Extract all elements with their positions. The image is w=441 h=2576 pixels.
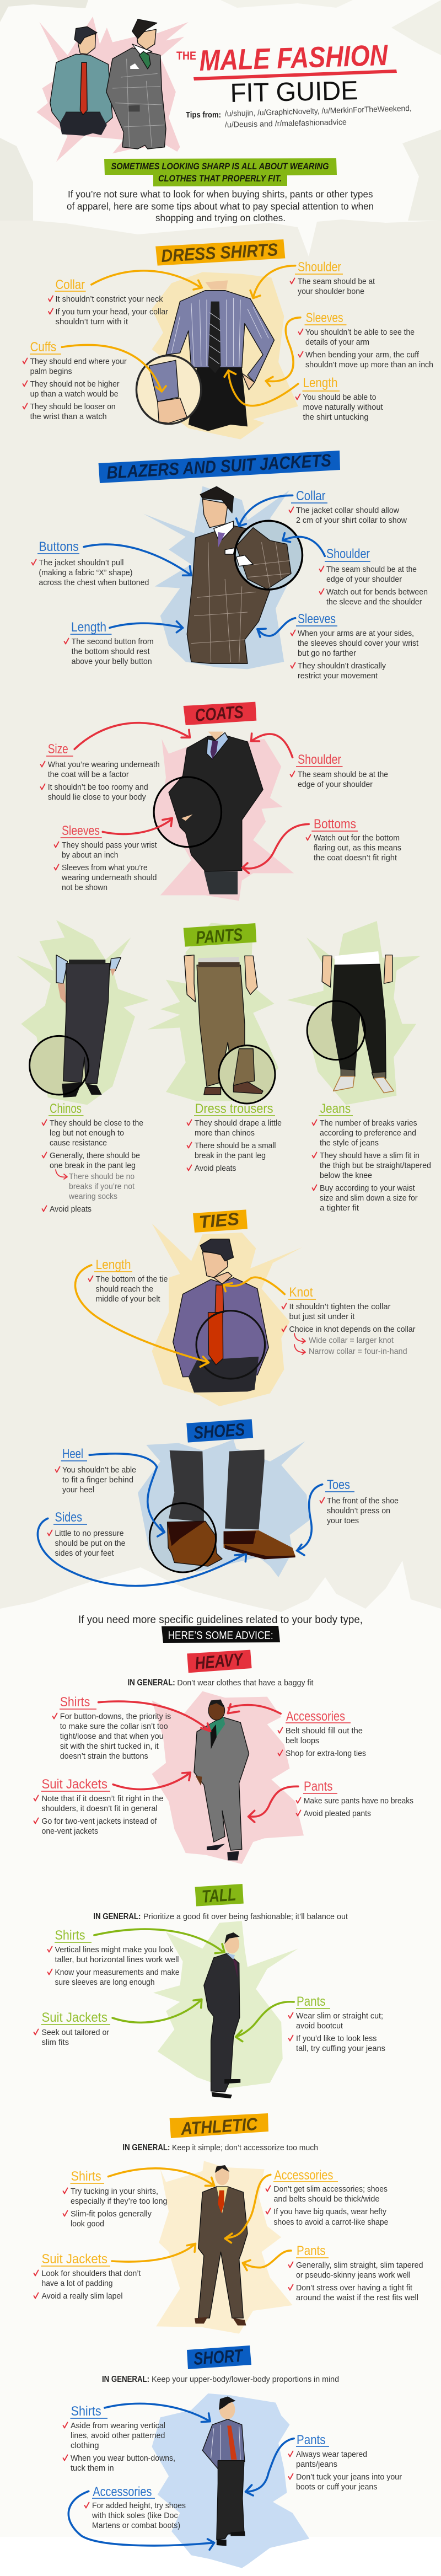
general advice line: Keep it simple; don’t accessorize too much [172, 2143, 318, 2152]
callout: knot: Knot [289, 1285, 313, 1300]
callout: shoulder: The seam should be at the [298, 770, 388, 779]
callout: sleeves [54, 823, 157, 892]
callout: bottoms: flaring out, as this means [314, 843, 401, 853]
illustration: heavy figure [152, 1691, 304, 1864]
callout: length: Length [96, 1257, 131, 1272]
column: chinos: There should be no [69, 1172, 135, 1181]
callout: length: Length [71, 620, 106, 635]
callout: shirts: Slim-fit polos generally [71, 2209, 152, 2219]
callout: accessories [266, 2168, 388, 2227]
section intro: body type advice: If you need more specific guidelines related to your body type, [78, 1614, 363, 1626]
arrows [75, 1265, 284, 1367]
callout: shirts: lines, avoid other patterned [71, 2431, 165, 2440]
callout: sleeves: the sleeves should cover your wrist [298, 639, 419, 648]
callout: size: should lie close to your body [48, 792, 146, 802]
callout: length [64, 620, 154, 666]
column: jeans: below the knee [320, 1171, 372, 1180]
column: jeans: They should have a slim fit in [320, 1151, 420, 1160]
callout: pants [289, 1994, 385, 2053]
callout: shoulder [290, 260, 375, 296]
detail circle: cuff [136, 356, 201, 424]
panel: blazers and suit jackets [32, 450, 428, 681]
banner heading: blazers: BLAZERS AND SUIT JACKETS [106, 450, 332, 483]
column: dress trousers: There should be a small [195, 1141, 276, 1150]
callout: accessories: Shop for extra-long ties [286, 1749, 366, 1758]
callout: shoulder: edge of your shoulder [326, 575, 402, 584]
callout: length: should reach the [96, 1284, 153, 1294]
arrows [108, 2168, 291, 2270]
callout: sleeves: When bending your arm, the cuff [305, 350, 420, 360]
callout: buttons: across the chest when buttoned [39, 578, 149, 587]
callout: sleeves: but go no farther [298, 649, 356, 658]
callout: size: the coat will be a factor [48, 770, 129, 779]
callout: size: It shouldn’t be too roomy and [48, 783, 148, 792]
callout: toes: The front of the shoe [327, 1496, 399, 1506]
general advice line: IN GENERAL: [122, 2143, 170, 2152]
callout: knot [282, 1285, 416, 1356]
banner heading: pants: PANTS [195, 924, 244, 947]
callout: cuffs: They should not be higher [30, 379, 120, 389]
column: dress trousers [187, 1101, 282, 1173]
callout: heel [55, 1447, 136, 1495]
credits: /u/Deusis and /r/malefashionadvice [225, 118, 347, 130]
callout: shirts: Shirts [71, 2404, 101, 2419]
arrows [62, 266, 300, 406]
illustration: chinos figure [17, 920, 149, 1105]
callout: knot: Narrow collar = four-in-hand [309, 1347, 407, 1356]
green subtitle banner [104, 158, 337, 186]
credits: /u/shujin, /u/GraphicNovelty, /u/MerkinForTheWeekend, [225, 104, 412, 119]
panel: coats [41, 701, 401, 901]
illustration: dress shirt figure [152, 272, 298, 440]
credits: Tips from: [186, 110, 221, 120]
callout: pants [289, 2433, 402, 2492]
intro paragraph: If you’re not sure what to look for when buying shirts, pants or other types [68, 189, 373, 200]
callout: cuffs: They should be looser on [30, 402, 116, 411]
callout: collar: If you turn your head, your collar [55, 307, 168, 317]
callout: suit jackets [34, 2010, 110, 2047]
column: dress trousers: Avoid pleats [195, 1164, 236, 1173]
callout: shirts: sure sleeves are long enough [55, 1978, 154, 1987]
callout: collar: Collar [55, 277, 85, 292]
callout: shirts: Shirts [55, 1928, 85, 1943]
callout: shirts: Shirts [60, 1695, 90, 1710]
callout: shoulder [320, 547, 428, 607]
callout: sleeves: wearing underneath should [61, 873, 157, 882]
panel: pants [17, 920, 431, 1214]
callout: sides: Sides [55, 1510, 82, 1525]
callout: sleeves: When your arms are at your sides, [298, 629, 414, 638]
panel: tall [34, 1884, 385, 2098]
column: dress trousers: Dress trousers [195, 1101, 273, 1116]
panel: short [63, 2345, 402, 2568]
banner heading: shoes: SHOES [193, 1420, 246, 1443]
illustration: dress trousers figure [148, 923, 278, 1104]
callout: cuffs: palm begins [30, 367, 72, 376]
callout: collar: The jacket collar should allow [296, 506, 399, 515]
callout: toes: Toes [327, 1477, 350, 1492]
title: fit guide: FIT GUIDE [230, 76, 358, 108]
green subtitle banner: CLOTHES THAT PROPERLY FIT. [158, 173, 282, 184]
callout: shoulder: edge of your shoulder [298, 780, 373, 789]
illustration: coat figure with sleeve detail [154, 732, 294, 901]
column: jeans: according to preference and [320, 1128, 416, 1138]
callout: shoulder: Shoulder [298, 752, 341, 767]
banner heading: dress shirts: DRESS SHIRTS [160, 239, 279, 266]
callout: accessories: Accessories [274, 2168, 333, 2183]
callout: suit jackets [34, 2252, 141, 2301]
column: dress trousers: They should drape a little [195, 1118, 282, 1128]
column: jeans: the style of jeans [320, 1138, 379, 1148]
panel: ties [75, 1209, 415, 1406]
callout: pants [289, 2243, 423, 2302]
arrows [94, 1929, 294, 2042]
callout: pants: avoid bootcut [296, 2021, 343, 2031]
column: jeans: Jeans [320, 1101, 351, 1116]
column: jeans: Buy according to your waist [320, 1183, 415, 1193]
callout: cuffs: up than a watch would be [30, 389, 119, 399]
callout: buttons [32, 539, 149, 587]
intro paragraph: of apparel, here are some tips about what to pay special attention to when [67, 201, 374, 212]
column: chinos: breaks if you’re not [69, 1182, 135, 1191]
callout: bottoms: the coat doesn’t fit right [314, 853, 397, 863]
callout: accessories: and belts should be thick/wide [273, 2194, 379, 2204]
callout: pants: Pants [304, 1779, 333, 1794]
callout: shirts: Aside from wearing vertical [71, 2421, 165, 2430]
callout: suit jackets [34, 1777, 163, 1836]
arrows [68, 2403, 294, 2550]
callout: cuffs [23, 340, 127, 421]
column: jeans: a tighter fit [320, 1203, 359, 1213]
callout: accessories: Martens or combat boots) [92, 2521, 180, 2530]
callout: buttons: The jacket shouldn’t pull [39, 558, 123, 567]
illustration: short figure [152, 2393, 309, 2568]
illustration: blazer figure with shoulder detail [143, 486, 302, 669]
callout: bottoms: Watch out for the bottom [314, 833, 400, 843]
callout: shoulder [290, 752, 388, 789]
callout: cuffs: They should end where your [30, 357, 127, 366]
callout: length: middle of your belt [96, 1294, 160, 1304]
panel: dress shirts [23, 239, 433, 440]
arrows [99, 1701, 298, 1822]
callout: pants: around the waist if the rest fits well [296, 2293, 418, 2302]
callout: accessories: shoes to avoid a carrot-like shape [273, 2218, 388, 2227]
general advice line: IN GENERAL: [102, 2375, 149, 2384]
callout: heel: You shouldn’t be able [62, 1465, 136, 1475]
illustration: jeans figure [287, 921, 421, 1105]
callout: sleeves [291, 612, 419, 681]
callout: accessories: belt loops [286, 1736, 319, 1745]
column: chinos [42, 1101, 143, 1214]
callout: knot: but just sit under it [289, 1312, 355, 1321]
panel: heavy [34, 1649, 413, 1864]
callout: length: Length [303, 376, 337, 390]
callout: sleeves: You shouldn’t be able to see the [305, 328, 415, 337]
callout: size: Size [48, 742, 68, 757]
illustration: two men in shirt and suit [36, 17, 189, 162]
callout: size [41, 742, 160, 802]
callout: suit jackets: Seek out tailored or [42, 2028, 109, 2037]
illustration: tall figure [153, 1921, 298, 2098]
column: chinos: Avoid pleats [50, 1204, 92, 1214]
callout: shirts: For button-downs, the priority is [60, 1712, 171, 1721]
banner heading: athletic: ATHLETIC [180, 2114, 259, 2139]
column: chinos: wearing socks [68, 1192, 117, 1201]
column: jeans [312, 1101, 431, 1213]
column: chinos: Generally, there should be [50, 1151, 140, 1160]
banner heading: short: SHORT [193, 2345, 244, 2369]
callout: pants: pants/jeans [296, 2460, 337, 2469]
callout: pants: If you’d like to look less [296, 2034, 377, 2043]
column: chinos: Chinos [50, 1101, 82, 1116]
title: the male fashion: MALE FASHION [199, 39, 389, 77]
callout: shoulder: Watch out for bends between [326, 587, 428, 597]
arrows [84, 495, 325, 637]
callout: collar: It shouldn’t constrict your neck [55, 294, 163, 304]
callout: cuffs: the wrist than a watch [30, 412, 107, 421]
callout: toes: your toes [327, 1516, 359, 1525]
callout: accessories: Accessories [286, 1709, 345, 1724]
general advice line: Don’t wear clothes that have a baggy fit [177, 1678, 314, 1688]
callout: pants: boots or cuff your jeans [296, 2482, 377, 2492]
callout: pants: tall, try cuffing your jeans [296, 2044, 385, 2053]
banner heading: ties: TIES [198, 1209, 240, 1232]
column: chinos: They should be close to the [50, 1118, 143, 1128]
intro paragraph: shopping and trying on clothes. [155, 212, 286, 223]
callout: collar: 2 cm of your shirt collar to show [296, 516, 407, 525]
callout: accessories [85, 2484, 186, 2530]
callout: shoulder: The seam should be at [298, 277, 375, 286]
intro paragraph [67, 189, 374, 223]
callout: shirts: to make sure the collar isn’t too [60, 1722, 168, 1731]
column: jeans: the thigh but be straight/tapered [320, 1161, 431, 1170]
callout: collar: Collar [296, 489, 326, 504]
callout: length: above your belly button [72, 657, 152, 666]
callout: sleeves: Sleeves [298, 612, 336, 626]
callout: shirts: When you wear button-downs, [71, 2454, 175, 2463]
callout: heel: Heel [62, 1447, 83, 1461]
callout: accessories: Belt should fill out the [286, 1726, 363, 1736]
column: jeans: The number of breaks varies [320, 1118, 417, 1128]
callout: pants: Generally, slim straight, slim tapered [296, 2261, 423, 2270]
callout: suit jackets: Suit Jackets [42, 2252, 107, 2267]
callout: collar [49, 277, 168, 326]
title: the male fashion: THE [176, 50, 196, 62]
credits [186, 104, 412, 130]
callout: sleeves: restrict your movement [298, 671, 378, 681]
callout: sleeves: not be shown [62, 883, 107, 892]
callout: shirts: Know your measurements and make [55, 1968, 180, 1977]
callout: pants [297, 1779, 413, 1818]
callout: length: the bottom should rest [72, 647, 150, 656]
arrows [37, 1454, 322, 1586]
callout: sleeves: shouldn’t move up more than an inch [305, 360, 433, 369]
callout: shirts [53, 1695, 171, 1761]
callout: toes [320, 1477, 399, 1525]
callout: shirts: Shirts [71, 2169, 101, 2184]
column: jeans: size and slim down a size for [320, 1193, 418, 1203]
callout: shoulder: your shoulder bone [298, 287, 364, 296]
illustration: shoes and trouser legs with detail circle [138, 1439, 309, 1577]
title block with two illustrated men [36, 17, 412, 223]
callout: toes: shouldn’t press on [327, 1506, 390, 1515]
callout: sleeves: They should pass your wrist [62, 840, 157, 850]
callout: shoulder: The seam should be at the [326, 565, 417, 574]
callout: size: What you’re wearing underneath [48, 760, 160, 769]
banner heading: coats: COATS [194, 701, 244, 725]
callout: collar: shouldn’t turn with it [55, 317, 128, 326]
illustration: tie figure with detail circle [152, 1223, 302, 1406]
callout: sleeves: by about an inch [62, 850, 118, 860]
callout: sleeves: They shouldn’t drastically [298, 661, 386, 671]
callout: length: move naturally without [303, 403, 383, 412]
callout: sleeves [299, 310, 433, 369]
callout: shirts: tight/loose and that when you [60, 1732, 164, 1741]
callout: sides: Little to no pressure [55, 1529, 123, 1538]
callout: suit jackets: Suit Jackets [42, 2010, 107, 2025]
callout: accessories: If you have big quads, wear hefty [273, 2207, 386, 2216]
section intro: body type advice [78, 1614, 363, 1643]
callout: accessories: Don’t get slim accessories; shoes [273, 2184, 388, 2194]
callout: pants: or pseudo-skinny jeans work well [296, 2270, 411, 2280]
banner heading: heavy: HEAVY [194, 1649, 245, 1673]
callout: accessories: with thick soles (like Doc [92, 2511, 178, 2520]
callout: cuffs: Cuffs [30, 340, 56, 355]
callout: shirts: tuck them in [71, 2463, 114, 2473]
callout: accessories: Accessories [93, 2484, 152, 2499]
callout: shirts: Vertical lines might make you look [55, 1945, 174, 1954]
callout: heel: your heel [62, 1485, 94, 1495]
callout: suit jackets: have a lot of padding [42, 2279, 112, 2288]
callout: length: You should be able to [303, 393, 376, 402]
callout: accessories: For added height, try shoes [92, 2501, 186, 2510]
callout: shirts: especially if they’re too long [71, 2197, 168, 2206]
callout: shirts [63, 2404, 175, 2473]
callout: length: The second button from [72, 637, 154, 646]
callout: pants: Don’t stress over having a tight fit [296, 2283, 413, 2293]
callout: sleeves: Sleeves [306, 310, 343, 325]
callout: suit jackets: Look for shoulders that don’t [42, 2269, 141, 2278]
callout: sleeves: details of your arm [305, 338, 369, 347]
callout: sleeves: Sleeves [62, 823, 100, 838]
callout: pants: Make sure pants have no breaks [304, 1796, 413, 1806]
panel: athletic [34, 2113, 423, 2334]
callout: suit jackets: Suit Jackets [42, 1777, 107, 1792]
section intro: body type advice: HERE’S SOME ADVICE: [168, 1630, 273, 1642]
callout: sleeves: Sleeves from what you’re [62, 863, 148, 872]
green subtitle banner: SOMETIMES LOOKING SHARP IS ALL ABOUT WEARING [111, 161, 329, 172]
callout: pants: Pants [297, 2243, 325, 2258]
callout: shirts: Try tucking in your shirts, [71, 2187, 158, 2196]
callout: shirts [63, 2169, 168, 2229]
callout: pants: Don’t tuck your jeans into your [296, 2472, 402, 2482]
callout: length: The bottom of the tie [96, 1274, 168, 1284]
callout: pants: Wear slim or straight cut; [296, 2011, 383, 2021]
callout: suit jackets: Note that if it doesn’t fit right in the [42, 1794, 163, 1803]
column: chinos: one break in the pant leg [50, 1161, 136, 1170]
callout: shoulder: Shoulder [298, 260, 341, 275]
callout: knot: It shouldn’t tighten the collar [289, 1302, 390, 1311]
callout: length: the shirt untucking [303, 413, 368, 422]
callout: knot: Wide collar = larger knot [309, 1336, 394, 1345]
callout: pants: Pants [297, 1994, 325, 2009]
callout: sides: sides of your feet [55, 1549, 114, 1558]
callout: pants: Avoid pleated pants [304, 1809, 371, 1818]
callout: shirts [47, 1928, 180, 1987]
callout: suit jackets: Avoid a really slim lapel [42, 2291, 122, 2301]
general advice line: Prioritize a good fit over being fashionable; it’ll balance out [143, 1912, 348, 1921]
callout: bottoms [306, 817, 401, 863]
callout: shirts: doesn’t strain the buttons [60, 1752, 148, 1761]
callout: sides: should be put on the [55, 1539, 126, 1548]
callout: knot: Choice in knot depends on the collar [289, 1325, 416, 1334]
callout: suit jackets: Go for two-vent jackets instead of [42, 1817, 157, 1826]
callout: accessories [278, 1709, 366, 1758]
general advice line: IN GENERAL: [93, 1912, 141, 1921]
callout: sides [47, 1510, 126, 1558]
illustration: athletic figure [156, 2161, 293, 2334]
callout: buttons: (making a fabric “X” shape) [39, 568, 132, 577]
callout: suit jackets: slim fits [42, 2038, 69, 2047]
panel: shoes [37, 1419, 399, 1586]
column: dress trousers: more than chinos [195, 1128, 255, 1138]
arrows [74, 723, 309, 873]
callout: shirts: look good [71, 2219, 104, 2229]
callout: pants: Always wear tapered [296, 2450, 367, 2459]
general advice line: IN GENERAL: [128, 1678, 175, 1688]
column: chinos: cause resistance [50, 1138, 107, 1148]
column: chinos: leg but not enough to [50, 1128, 124, 1138]
callout: bottoms: Bottoms [314, 817, 356, 832]
callout: suit jackets: shoulders, it doesn’t fit in general [42, 1804, 158, 1813]
general advice line: Keep your upper-body/lower-body proportions in mind [152, 2375, 339, 2384]
callout: collar [289, 489, 407, 525]
callout: shoulder: the sleeve and the shoulder [326, 597, 422, 607]
callout: pants: Pants [297, 2433, 325, 2448]
callout: suit jackets: one-vent jackets [42, 1827, 98, 1836]
callout: shirts: sit with the shirt tucked in, it [60, 1742, 159, 1751]
callout: heel: to fit a finger behind [62, 1475, 133, 1485]
banner heading: tall: TALL [201, 1884, 236, 1906]
callout: shoulder: Shoulder [326, 547, 370, 561]
column: dress trousers: break in the pant leg [195, 1151, 266, 1160]
callout: buttons: Buttons [39, 539, 79, 554]
callout: length [88, 1257, 168, 1304]
callout: shirts: clothing [71, 2441, 99, 2450]
callout: shirts: taller, but horizontal lines work well [55, 1955, 179, 1964]
callout: length [295, 376, 383, 422]
